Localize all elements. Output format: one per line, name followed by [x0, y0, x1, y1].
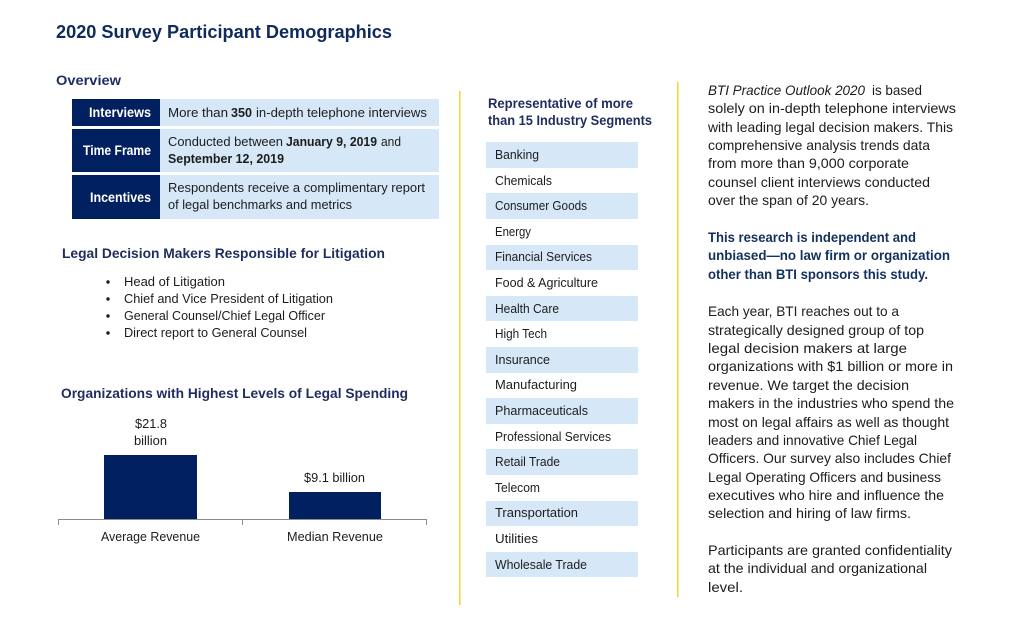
industry list: Wholesale Trade: [495, 557, 587, 572]
industry list: [486, 142, 638, 577]
bar: average revenue: [101, 416, 200, 544]
panel: legal spending chart: [58, 385, 426, 544]
industry list: Financial Services: [495, 249, 592, 264]
callout: independence statement: [708, 230, 950, 282]
paragraph: study description: [707, 83, 956, 208]
bar: average revenue: billion: [134, 433, 167, 448]
callout: independence statement: unbiased—no law firm or organization: [708, 248, 950, 263]
row: incentives: of legal benchmarks and metrics: [168, 197, 352, 212]
paragraph: participant selection: Officers. Our survey also includes Chief: [708, 451, 951, 466]
industry list: Chemicals: [495, 173, 552, 188]
title: 2020 Survey Participant Demographics: [56, 21, 392, 42]
paragraph: study description: counsel client interviews conducted: [708, 175, 930, 190]
paragraph: confidentiality: Participants are granted confidentiality: [708, 543, 952, 558]
paragraph: participant selection: makers in the industries who spend the: [708, 396, 954, 411]
industry list: Food & Agriculture: [495, 275, 598, 290]
row: time frame: September 12, 2019: [168, 151, 284, 166]
industry list: Banking: [495, 147, 539, 162]
paragraph: confidentiality: at the individual and organizational: [708, 561, 927, 576]
panel: methodology text: [707, 83, 956, 595]
row: interviews: Interviews: [89, 105, 151, 120]
industry list: Energy: [495, 224, 531, 239]
industry list: Health Care: [495, 301, 559, 316]
paragraph: participant selection: selection and hiring of law firms.: [708, 506, 911, 521]
industry list: Insurance: [495, 352, 550, 367]
row: time frame: and: [381, 134, 401, 149]
row: incentives: [72, 175, 439, 219]
row: interviews: [72, 99, 439, 126]
row: time frame: [72, 129, 439, 172]
row: time frame: January 9, 2019: [286, 134, 377, 149]
heading: legal spending: Organizations with Highest Levels of Legal Spending: [61, 385, 408, 401]
paragraph: study description: over the span of 20 years.: [708, 193, 869, 208]
bar: median revenue: Median Revenue: [287, 529, 383, 544]
heading: overview: Overview: [56, 72, 121, 88]
industry list: Retail Trade: [495, 454, 560, 469]
bullet list: Head of Litigation: [124, 274, 225, 289]
paragraph: study description: BTI Practice Outlook 2020: [708, 83, 865, 98]
panel: industry segments: [486, 96, 652, 577]
bar: average revenue: Average Revenue: [101, 529, 200, 544]
heading: industry segments: [488, 96, 652, 128]
paragraph: participant selection: [708, 304, 954, 521]
bar: median revenue: $9.1 billion: [304, 470, 365, 485]
heading: legal decision makers: Legal Decision Makers Responsible for Litigation: [62, 245, 385, 261]
industry list: Transportation: [495, 505, 578, 520]
bullet list: General Counsel/Chief Legal Officer: [124, 308, 326, 323]
industry list: Manufacturing: [495, 377, 577, 392]
paragraph: participant selection: most on legal affairs as well as thought: [708, 415, 949, 430]
row: time frame: Time Frame: [83, 143, 151, 158]
heading: industry segments: Representative of more: [488, 96, 633, 111]
row: interviews: More than: [168, 105, 228, 120]
paragraph: participant selection: strategically designed group of top: [708, 323, 924, 338]
callout: independence statement: This research is independent and: [708, 230, 916, 245]
bar: median revenue: [287, 470, 383, 544]
industry list: Professional Services: [495, 429, 611, 444]
industry list: Utilities: [495, 531, 539, 546]
paragraph: participant selection: leaders and innovative Chief Legal: [708, 433, 917, 448]
paragraph: participant selection: executives who hire and influence the: [708, 488, 944, 503]
paragraph: study description: solely on in-depth telephone interviews: [708, 101, 956, 116]
paragraph: study description: with leading legal decision makers. This: [707, 120, 953, 135]
paragraph: participant selection: revenue. We target the decision: [708, 378, 909, 393]
paragraph: study description: from more than 9,000 corporate: [708, 156, 909, 171]
row: incentives: Incentives: [90, 190, 151, 205]
industry list: Consumer Goods: [495, 198, 587, 213]
bullet list: Chief and Vice President of Litigation: [124, 291, 333, 306]
paragraph: participant selection: legal decision makers at large: [708, 341, 907, 356]
paragraph: participant selection: Each year, BTI reaches out to a: [708, 304, 899, 319]
bullet list: [106, 274, 333, 340]
panel: overview: [56, 72, 439, 219]
bar: average revenue: $21.8: [135, 416, 167, 431]
panel: legal decision makers: [62, 245, 385, 340]
row: time frame: Conducted between: [168, 134, 283, 149]
callout: independence statement: other than BTI sponsors this study.: [708, 267, 928, 282]
industry list: Telecom: [495, 480, 540, 495]
row: interviews: in-depth telephone interviews: [256, 105, 428, 120]
paragraph: study description: is based: [872, 83, 922, 98]
paragraph: confidentiality: [708, 543, 952, 595]
paragraph: confidentiality: level.: [708, 580, 743, 595]
paragraph: study description: comprehensive analysis trends data: [708, 138, 930, 153]
heading: industry segments: than 15 Industry Segments: [488, 113, 652, 128]
row: interviews: 350: [231, 105, 252, 120]
row: incentives: Respondents receive a complimentary report: [168, 180, 425, 195]
paragraph: participant selection: organizations with $1 billion or more in: [708, 359, 953, 374]
paragraph: participant selection: Legal Operating Officers and business: [708, 470, 941, 485]
industry list: High Tech: [495, 326, 547, 341]
industry list: Pharmaceuticals: [495, 403, 588, 418]
bullet list: Direct report to General Counsel: [124, 325, 307, 340]
